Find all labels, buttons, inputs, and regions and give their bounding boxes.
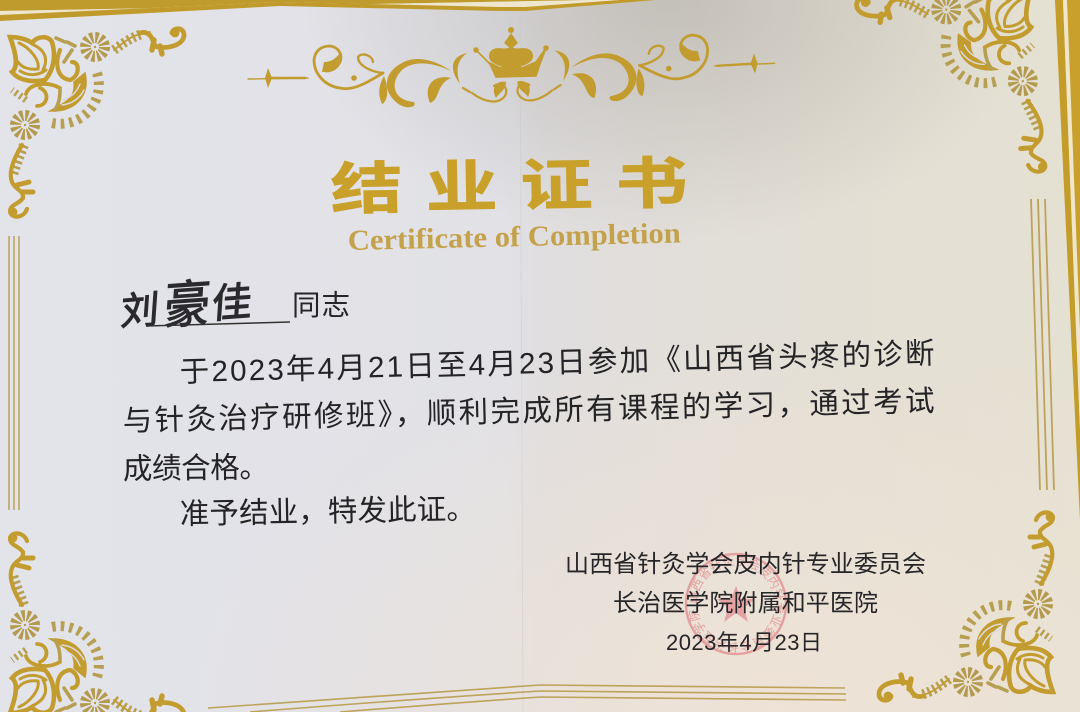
bottom triple rule xyxy=(208,685,846,712)
stamp: 山西省针灸学会皮内针专业委员会长治医学院附属和平医院 xyxy=(688,556,784,653)
certificate body text: 成绩合格。 xyxy=(123,451,269,486)
title: 结业证书 xyxy=(330,137,711,226)
issuer and date: 山西省针灸学会皮内针专业委员会 xyxy=(565,551,926,578)
issuer and date: 长治医学院附属和平医院 xyxy=(613,590,878,617)
right flourish xyxy=(515,30,776,107)
corner ornament: top right xyxy=(856,0,1047,186)
name underline xyxy=(146,322,290,326)
left flourish xyxy=(248,46,506,107)
corner ornament: top left xyxy=(9,29,184,217)
issuer and date: 2023年4月23日 xyxy=(666,630,822,655)
top gold border xyxy=(0,0,655,21)
handwritten name: 刘 xyxy=(119,288,160,334)
subtitle: Certificate of Completion xyxy=(347,217,681,257)
crown ornament xyxy=(248,27,776,107)
stamp xyxy=(684,552,788,656)
certificate body text: 准予结业，特发此证。 xyxy=(180,493,476,531)
corner ornament: bottom left xyxy=(9,533,184,712)
left triple rule xyxy=(9,236,19,510)
handwritten name: 豪 xyxy=(162,276,212,336)
certificate body text: 于2023年4月21日至4月23日参加《山西省头疼的诊断 xyxy=(179,337,935,389)
handwritten name: 佳 xyxy=(210,279,253,327)
corner ornament: bottom right xyxy=(879,512,1054,700)
handwritten name xyxy=(119,276,253,336)
certificate body text xyxy=(122,337,935,531)
right gold border xyxy=(1055,0,1080,520)
salutation: 同志 xyxy=(292,283,350,324)
crown xyxy=(473,27,549,77)
issuer and date xyxy=(565,551,926,655)
certificate body text: 与针灸治疗研修班》，顺利完成所有课程的学习，通过考试 xyxy=(122,385,935,438)
right triple rule xyxy=(1031,199,1054,490)
